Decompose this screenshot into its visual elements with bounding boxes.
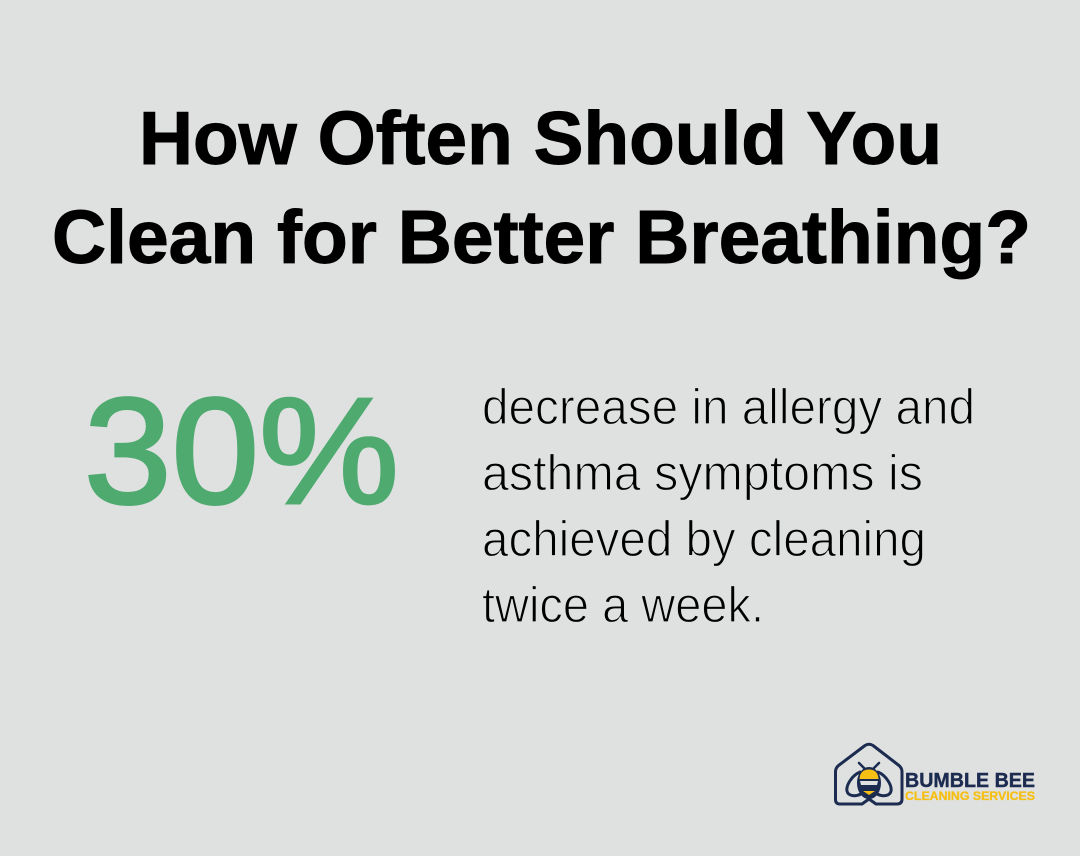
title: How Often Should You — [139, 96, 942, 180]
brand tagline: CLEANING SERVICES — [905, 789, 1035, 803]
description text: asthma symptoms is — [482, 445, 923, 501]
title: Clean for Better Breathing? — [52, 195, 1031, 279]
brand name: BUMBLE BEE — [905, 770, 1035, 792]
logo: Bumble Bee Cleaning Services — [836, 744, 1035, 804]
title — [52, 96, 1031, 279]
statistic: 30%: 30% — [84, 366, 399, 535]
description text: twice a week. — [482, 577, 764, 633]
description text: decrease in allergy and — [482, 379, 975, 435]
icon: house with bee — [836, 744, 902, 804]
description text — [482, 379, 975, 633]
description text: achieved by cleaning — [482, 511, 926, 567]
